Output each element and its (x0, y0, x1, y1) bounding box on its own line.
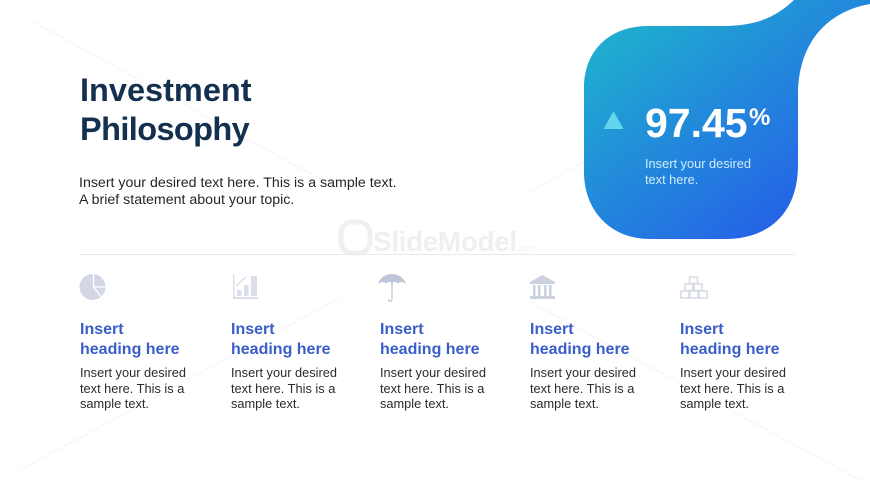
body text (231, 365, 337, 411)
heading: heading here (680, 341, 780, 358)
icon: umbrella (378, 274, 406, 302)
watermark logo (338, 220, 536, 257)
heading: heading here (231, 341, 331, 358)
heading (530, 321, 630, 358)
divider (80, 254, 795, 255)
heading: Insert (380, 321, 424, 338)
KPI caption (645, 156, 751, 186)
heading: heading here (530, 341, 630, 358)
KPI caption: text here. (645, 172, 698, 186)
intro text: Insert your desired text here. This is a sample text. (79, 175, 397, 191)
panel: column 1 (80, 274, 186, 411)
body text (680, 365, 786, 411)
body text: sample text. (530, 396, 599, 411)
body text: sample text. (80, 396, 149, 411)
intro text (79, 175, 397, 208)
body text: Insert your desired (380, 365, 486, 380)
body text: sample text. (680, 396, 749, 411)
KPI value: % (749, 104, 770, 131)
panel: column 5 (680, 276, 786, 411)
panel: column 3 (378, 274, 486, 411)
icon: gold bars (680, 276, 708, 299)
title: Philosophy (80, 110, 249, 146)
body text: Insert your desired (680, 365, 786, 380)
icon: bar chart (233, 274, 258, 299)
title: Investment (80, 72, 252, 108)
body text: text here. This is a (680, 381, 784, 396)
heading (231, 321, 331, 358)
panel: column 4 (530, 275, 636, 411)
heading: Insert (80, 321, 124, 338)
heading: Insert (680, 321, 724, 338)
heading: heading here (80, 341, 180, 358)
panel: column 2 (231, 274, 337, 411)
heading: Insert (231, 321, 275, 338)
heading: heading here (380, 341, 480, 358)
body text (530, 365, 636, 411)
intro text: A brief statement about your topic. (79, 192, 294, 208)
body text: text here. This is a (530, 381, 634, 396)
icon: pie chart (80, 274, 106, 300)
icon: bank (530, 275, 555, 299)
body text: Insert your desired (80, 365, 186, 380)
KPI value: 97.45 (645, 100, 748, 146)
KPI caption: Insert your desired (645, 156, 751, 171)
body text (80, 365, 186, 411)
body text: text here. This is a (80, 381, 184, 396)
body text (380, 365, 486, 411)
heading (680, 321, 780, 358)
body text: sample text. (231, 396, 300, 411)
title (80, 72, 252, 146)
heading (380, 321, 480, 358)
body text: text here. This is a (380, 381, 484, 396)
body text: Insert your desired (231, 365, 337, 380)
icon: up triangle (604, 111, 624, 129)
watermark logo: SlideModel.com (373, 226, 536, 257)
body text: Insert your desired (530, 365, 636, 380)
heading (80, 321, 180, 358)
heading: Insert (530, 321, 574, 338)
body text: text here. This is a (231, 381, 335, 396)
body text: sample text. (380, 396, 449, 411)
